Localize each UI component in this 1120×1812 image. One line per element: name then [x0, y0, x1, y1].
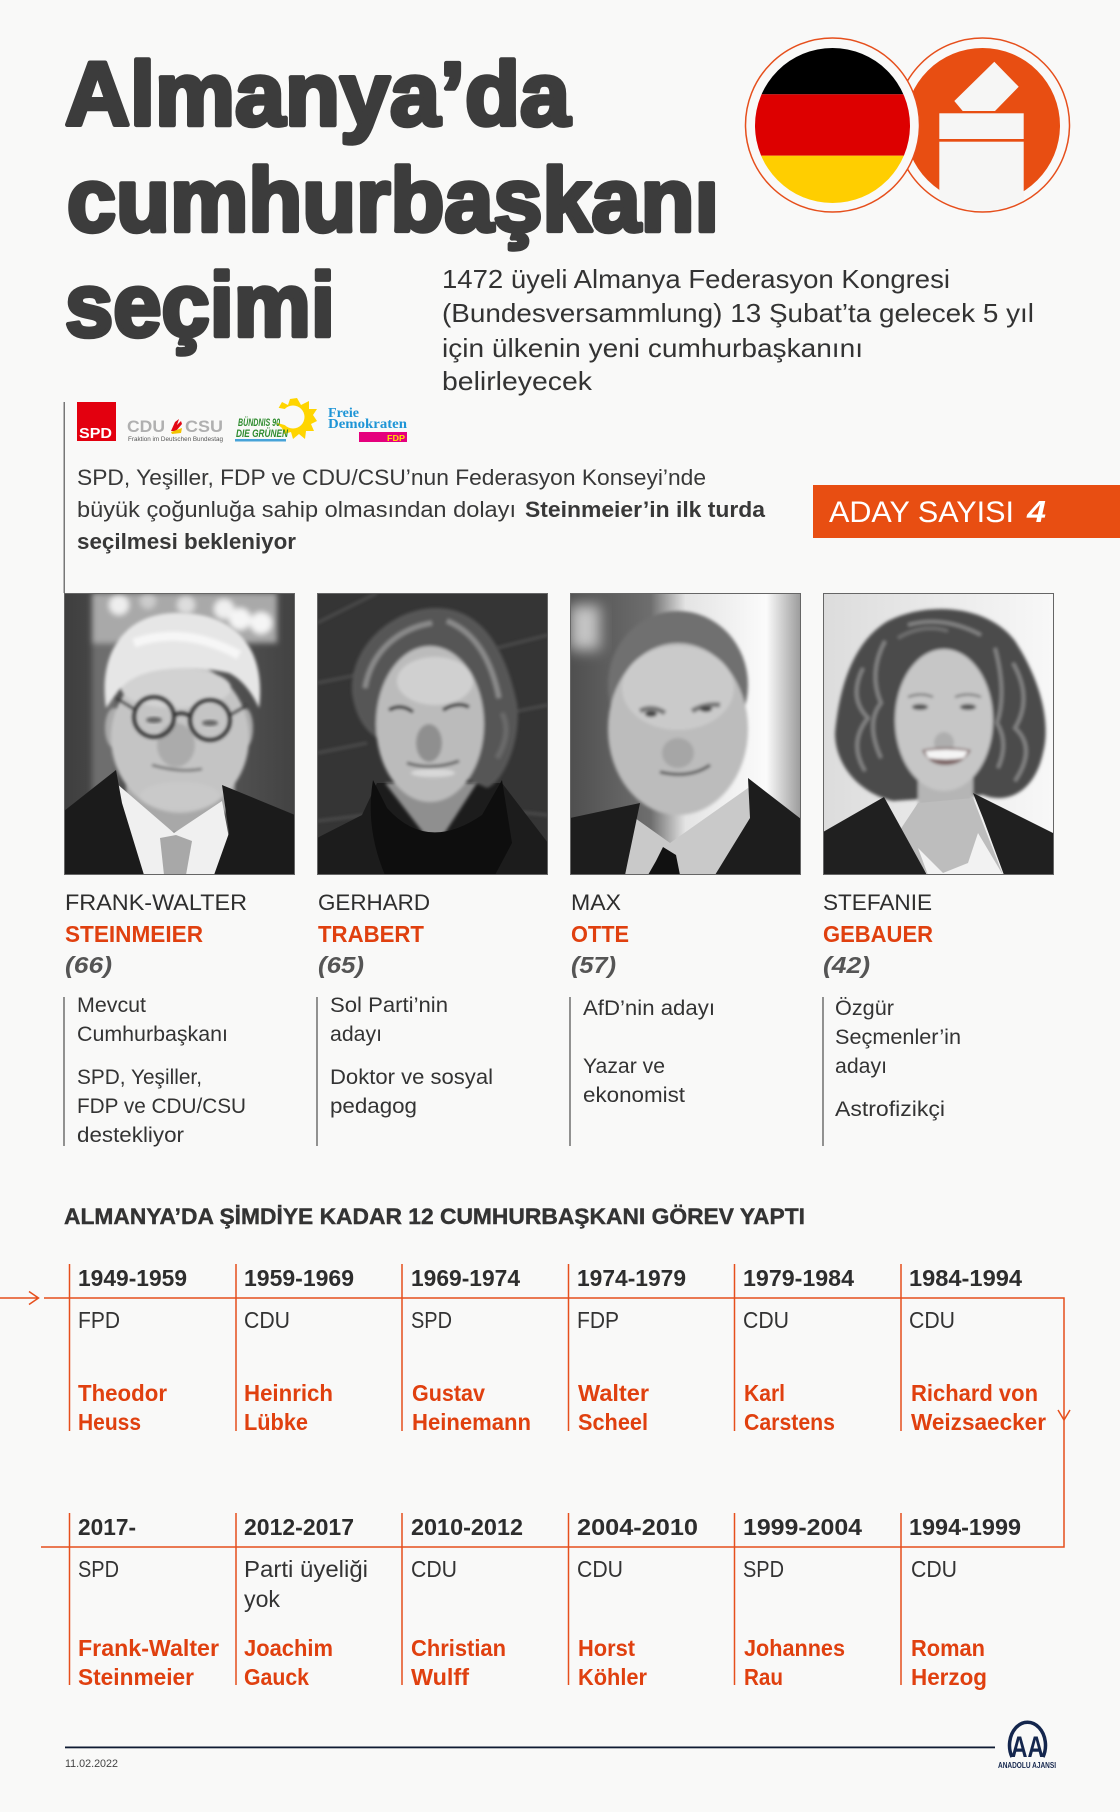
icon: German flag circle [746, 38, 920, 212]
portrait: Otte [570, 593, 801, 875]
president: Frank-Walter Steinmeier [78, 1514, 219, 1690]
party logos [77, 398, 407, 443]
candidate: Frank-Walter Steinmeier [64, 890, 247, 1147]
president: Johannes Rau: SPD [743, 1556, 784, 1582]
candidate: Stefanie Gebauer: Seçmenler’in [835, 1026, 961, 1049]
president: Theodor Heuss [78, 1265, 187, 1435]
candidate: Gerhard Trabert [317, 890, 493, 1146]
candidate: Max Otte [570, 890, 715, 1146]
president: Theodor Heuss: 1949-1959 [78, 1265, 187, 1291]
president: Christian Wulff [411, 1514, 523, 1690]
logo: Bündnis 90 / Die Grünen: DIE GRÜNEN [236, 427, 289, 440]
federal council text block: seçilmesi bekleniyor [77, 529, 296, 554]
president: Joachim Gauck: yok [244, 1586, 280, 1612]
candidate: Frank-Walter Steinmeier: Cumhurbaşkanı [77, 1023, 228, 1046]
title: Almanya’da [65, 45, 571, 145]
president: Richard von Weizsaecker: CDU [909, 1307, 955, 1333]
candidate: Max Otte: OTTE [571, 921, 629, 947]
candidate: Max Otte: MAX [571, 890, 621, 915]
logo: SPD: SPD [79, 425, 112, 442]
president: Joachim Gauck: Gauck [244, 1664, 309, 1690]
portrait: Trabert [317, 593, 548, 875]
logo: FDP [328, 406, 407, 443]
president: Horst Köhler: CDU [577, 1556, 623, 1582]
president: Frank-Walter Steinmeier: 2017- [78, 1514, 136, 1540]
candidate: Stefanie Gebauer: Astrofizikçi [835, 1098, 945, 1121]
candidate: Max Otte: ekonomist [583, 1084, 685, 1107]
president: Horst Köhler: Köhler [578, 1664, 647, 1690]
president: Richard von Weizsaecker: Weizsaecker [911, 1409, 1046, 1435]
logo: Anadolu Ajansı: ANADOLU AJANSI [998, 1760, 1056, 1770]
intro paragraph [442, 264, 1034, 396]
candidate: Gerhard Trabert: Doktor ve sosyal [330, 1066, 493, 1089]
president: Joachim Gauck: Parti üyeliği [244, 1556, 368, 1582]
logo: CDU/CSU: CDU [127, 417, 165, 436]
president: Karl Carstens [743, 1265, 854, 1435]
candidate: Stefanie Gebauer: STEFANIE [823, 890, 932, 915]
callout: candidate count: ADAY SAYISI [829, 496, 1014, 529]
president: Richard von Weizsaecker [909, 1265, 1046, 1435]
president: Walter Scheel: Scheel [578, 1409, 648, 1435]
footer date: 11.02.2022 [65, 1758, 118, 1770]
logo: Anadolu Ajansı: AA [1011, 1731, 1044, 1764]
candidate: Gerhard Trabert: Sol Parti’nin [330, 994, 448, 1017]
president: Heinrich Lübke [244, 1265, 354, 1435]
logo: CDU/CSU: Fraktion im Deutschen Bundestag [128, 436, 223, 443]
president: Theodor Heuss: Heuss [78, 1409, 141, 1435]
logo: FDP: Demokraten [328, 417, 407, 432]
president: Gustav Heinemann: Gustav [412, 1380, 485, 1406]
intro paragraph: (Bundesversammlung) 13 Şubat’ta gelecek 5 yıl [442, 298, 1034, 328]
president: Richard von Weizsaecker: Richard von [911, 1380, 1038, 1406]
logo: FDP: FDP [387, 434, 406, 443]
federal council text block: Steinmeier’in ilk turda [525, 497, 766, 522]
president: Theodor Heuss: Theodor [78, 1380, 167, 1406]
president: Walter Scheel: Walter [578, 1380, 649, 1406]
president: Frank-Walter Steinmeier: Frank-Walter [78, 1635, 219, 1661]
president: Johannes Rau: 1999-2004 [743, 1514, 862, 1540]
president: Roman Herzog: Herzog [911, 1664, 987, 1690]
logo: Bündnis 90 / Die Grünen [235, 398, 317, 442]
title: cumhurbaşkanı [67, 151, 719, 251]
timeline heading: ALMANYA’DA ŞİMDİYE KADAR 12 CUMHURBAŞKANI GÖREV YAPTI [64, 1204, 805, 1229]
candidate: Frank-Walter Steinmeier: Mevcut [77, 994, 146, 1017]
president: Christian Wulff: Wulff [411, 1664, 469, 1690]
president: Roman Herzog: Roman [911, 1635, 985, 1661]
president: Gustav Heinemann: SPD [411, 1307, 452, 1333]
president: Walter Scheel: 1974-1979 [577, 1265, 686, 1291]
president: Heinrich Lübke: Heinrich [244, 1380, 333, 1406]
candidate: Frank-Walter Steinmeier: FDP ve CDU/CSU [77, 1095, 246, 1118]
icon: ballot box circle [896, 38, 1070, 212]
candidate: Max Otte: (57) [571, 952, 616, 978]
president: Johannes Rau [743, 1514, 862, 1690]
candidate: Frank-Walter Steinmeier: SPD, Yeşiller, [77, 1066, 202, 1089]
candidate: Gerhard Trabert: TRABERT [318, 921, 424, 947]
candidate: Stefanie Gebauer: Özgür [835, 997, 894, 1020]
president: Horst Köhler: Horst [578, 1635, 635, 1661]
president: Richard von Weizsaecker: 1984-1994 [909, 1265, 1022, 1291]
logo: CDU/CSU: CSU [185, 417, 223, 436]
president: Joachim Gauck: Joachim [244, 1635, 333, 1661]
candidate: Frank-Walter Steinmeier: destekliyor [77, 1124, 184, 1147]
candidate: Frank-Walter Steinmeier: STEINMEIER [65, 921, 203, 947]
president: Karl Carstens: CDU [743, 1307, 789, 1333]
president: Horst Köhler: 2004-2010 [577, 1514, 698, 1540]
candidate: Gerhard Trabert: GERHARD [318, 890, 430, 915]
president: Joachim Gauck [244, 1514, 368, 1690]
federal council text block: SPD, Yeşiller, FDP ve CDU/CSU’nun Federasyon Konseyi’nde [77, 465, 706, 490]
president: Gustav Heinemann [411, 1265, 531, 1435]
logo: CDU/CSU [127, 417, 223, 443]
president: Roman Herzog: 1994-1999 [909, 1514, 1021, 1540]
president: Theodor Heuss: FPD [78, 1307, 120, 1333]
president: Roman Herzog: CDU [911, 1556, 957, 1582]
president: Joachim Gauck: 2012-2017 [244, 1514, 354, 1540]
intro paragraph: 1472 üyeli Almanya Federasyon Kongresi [442, 264, 950, 294]
president: Karl Carstens: Carstens [744, 1409, 835, 1435]
president: Frank-Walter Steinmeier: Steinmeier [78, 1664, 194, 1690]
candidate: Stefanie Gebauer: GEBAUER [823, 921, 933, 947]
president: Christian Wulff: Christian [411, 1635, 506, 1661]
president: Karl Carstens: Karl [744, 1380, 785, 1406]
candidate: Gerhard Trabert: (65) [318, 952, 364, 978]
president: Walter Scheel: FDP [577, 1307, 619, 1333]
president: Frank-Walter Steinmeier: SPD [78, 1556, 119, 1582]
president: Johannes Rau: Rau [744, 1664, 783, 1690]
president: Gustav Heinemann: Heinemann [412, 1409, 531, 1435]
portrait: Gebauer [823, 593, 1054, 875]
federal council text block [77, 465, 766, 554]
candidate: Gerhard Trabert: pedagog [330, 1095, 417, 1118]
candidate: Stefanie Gebauer [823, 890, 961, 1146]
candidate: Max Otte: Yazar ve [583, 1055, 665, 1078]
callout: candidate count [813, 485, 1120, 538]
portrait: Steinmeier [64, 593, 295, 875]
intro paragraph: belirleyecek [442, 366, 593, 396]
candidate: Max Otte: AfD’nin adayı [583, 997, 715, 1020]
title: seçimi [65, 256, 335, 356]
timeline connector lines [0, 1264, 1070, 1685]
title [65, 45, 719, 356]
candidate: Gerhard Trabert: adayı [330, 1023, 382, 1046]
president: Heinrich Lübke: Lübke [244, 1409, 308, 1435]
president: Johannes Rau: Johannes [744, 1635, 845, 1661]
federal council text block: büyük çoğunluğa sahip olmasından dolayı [77, 497, 516, 522]
president: Karl Carstens: 1979-1984 [743, 1265, 854, 1291]
president: Christian Wulff: 2010-2012 [411, 1514, 523, 1540]
president: Heinrich Lübke: CDU [244, 1307, 290, 1333]
callout: candidate count: 4 [1026, 494, 1046, 529]
intro paragraph: için ülkenin yeni cumhurbaşkanını [442, 333, 863, 363]
president: Christian Wulff: CDU [411, 1556, 457, 1582]
candidate: Frank-Walter Steinmeier: FRANK-WALTER [65, 890, 247, 915]
logo: Anadolu Ajansı [998, 1722, 1056, 1770]
candidate: Stefanie Gebauer: (42) [823, 952, 870, 978]
logo: FDP: Freie [328, 406, 359, 421]
president: Gustav Heinemann: 1969-1974 [411, 1265, 520, 1291]
president: Heinrich Lübke: 1959-1969 [244, 1265, 354, 1291]
logo: Bündnis 90 / Die Grünen: BÜNDNIS 90 [238, 416, 281, 429]
candidate: Stefanie Gebauer: adayı [835, 1055, 887, 1078]
candidate: Frank-Walter Steinmeier: (66) [65, 952, 112, 978]
logo: SPD [77, 402, 116, 442]
president: Walter Scheel [577, 1265, 686, 1435]
president: Roman Herzog [909, 1514, 1021, 1690]
president: Horst Köhler [577, 1514, 698, 1690]
